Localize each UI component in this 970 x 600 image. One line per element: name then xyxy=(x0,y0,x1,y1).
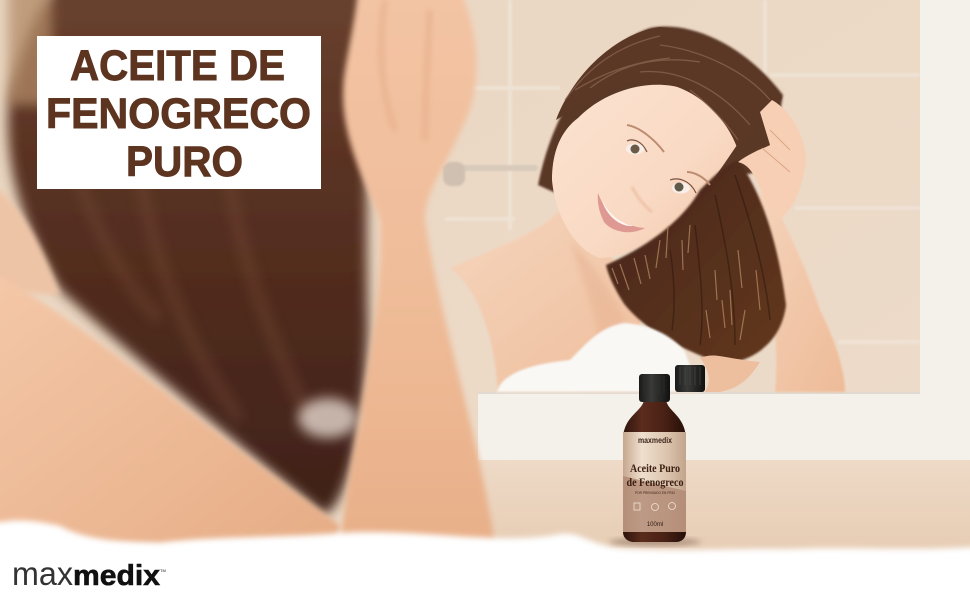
mirror frame and counter xyxy=(478,0,970,560)
reflection: eyes and brows xyxy=(626,125,710,194)
title text: FENOGRECO xyxy=(46,90,311,138)
reflection: neck shadow xyxy=(570,240,625,340)
reflection: hair highlights xyxy=(612,225,760,340)
blurred foreground woman xyxy=(0,0,495,545)
reflection: teeth xyxy=(601,198,633,226)
foreground: towel fragment xyxy=(298,398,358,438)
bottle: loose cap xyxy=(675,365,705,392)
bottle: label xyxy=(623,432,686,532)
title text: PURO xyxy=(126,138,243,186)
title panel xyxy=(37,36,321,189)
title text xyxy=(46,42,311,186)
reflection: top hair strands xyxy=(565,36,770,140)
foreground: hair streak highlights xyxy=(70,90,310,420)
reflection: woman in mirror xyxy=(450,27,845,392)
bottle: label logo: maxmedix xyxy=(638,436,672,445)
reflection: lower hand xyxy=(700,355,760,392)
white brush stroke footer xyxy=(0,521,970,600)
brand logo: TM xyxy=(160,568,166,573)
reflection: finger lines xyxy=(762,130,790,172)
reflection: top hair lock xyxy=(556,27,782,150)
reflection: face xyxy=(552,85,737,258)
title text: ACEITE DE xyxy=(70,42,285,90)
foreground: top-left tile xyxy=(8,0,52,105)
bottle: body xyxy=(623,400,686,542)
brand logo xyxy=(12,555,166,592)
bottle: cap xyxy=(639,374,670,402)
foreground: dark hair xyxy=(8,0,368,515)
reflection: shoulder and chest xyxy=(450,205,700,392)
product bottle xyxy=(609,365,705,546)
reflection: nose shadow xyxy=(632,187,652,212)
reflection: raised arm xyxy=(745,190,845,392)
reflection: wet hair mass xyxy=(606,160,786,364)
foreground: forearm and hand xyxy=(340,0,495,545)
foreground: finger shading xyxy=(381,0,430,140)
bottle: label subtitle: POR PRENSADO EN FRIO xyxy=(635,490,675,495)
reflection: smile xyxy=(598,193,645,232)
reflection: hand in hair xyxy=(738,100,806,220)
foreground: neck xyxy=(0,170,60,295)
bottle: shadow xyxy=(609,538,701,546)
bottle: volume: 100ml xyxy=(647,522,663,528)
bottle: label name: de Fenogreco xyxy=(626,475,684,489)
reflection: back hair xyxy=(538,27,783,200)
bottle: label icons xyxy=(634,502,676,510)
brand logo: medix xyxy=(73,560,160,592)
brand logo: max xyxy=(12,555,73,592)
reflection: towel xyxy=(497,323,700,392)
bottle: label name xyxy=(626,461,684,489)
foreground: shoulder xyxy=(0,262,340,545)
bottle: label name: Aceite Puro xyxy=(630,461,680,475)
reflection: dark hair strands xyxy=(670,175,770,345)
